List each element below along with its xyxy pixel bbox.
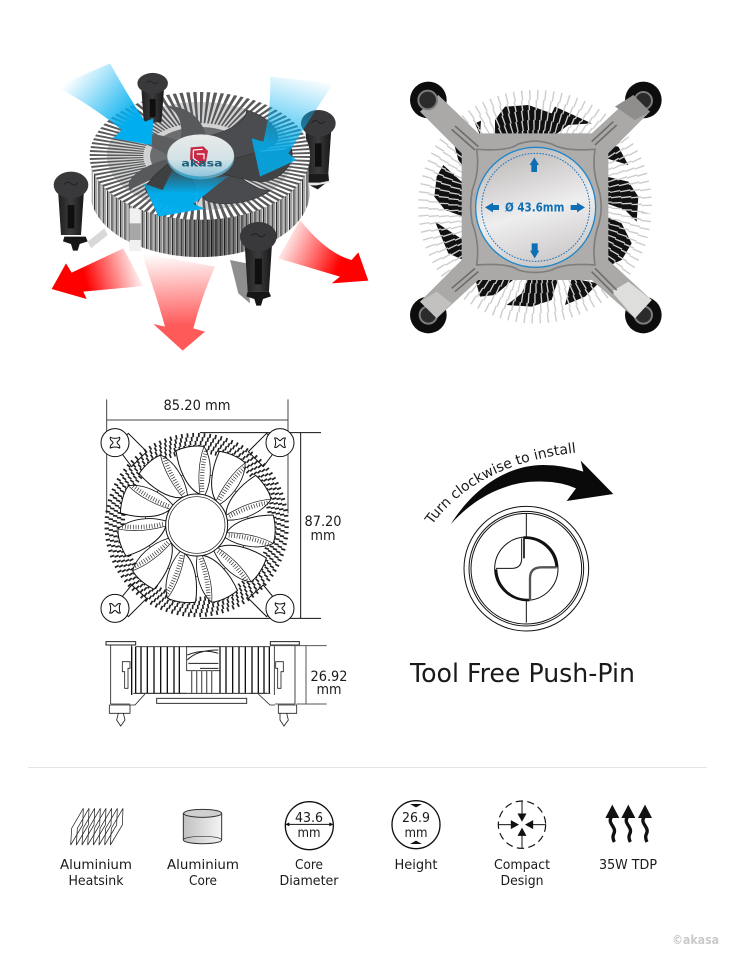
panel: tool free push pin: Turn clockwise to install: [424, 442, 575, 522]
icon: logo mark: [190, 146, 208, 166]
height label: mm: [316, 682, 342, 698]
base plate: [133, 693, 267, 703]
icon: diameter circle: [285, 802, 333, 850]
icon values: 43.6: [295, 811, 323, 826]
hub: [166, 494, 228, 556]
arrow: blue inflow top right: [252, 77, 333, 177]
icon values: mm: [298, 826, 320, 841]
bracket slots: [452, 122, 617, 293]
logo wordmark: akasa: [181, 158, 223, 169]
arrow: blue inflow top left: [57, 63, 153, 145]
depth label: 87.20: [304, 514, 342, 530]
pin: right: [301, 110, 336, 189]
label: Core: [189, 874, 217, 889]
label: Aluminium: [60, 858, 132, 873]
pin slots: [110, 437, 285, 614]
icon: compact arrows: [498, 801, 546, 849]
core ridge: [471, 141, 601, 272]
width label: 85.20 mm: [164, 398, 230, 414]
dotted core outline: [482, 153, 590, 261]
pin: front: [240, 222, 277, 306]
mount arms: [117, 433, 278, 617]
label: [60, 858, 132, 889]
front support under cooler: [230, 260, 250, 303]
mounting feet: [410, 82, 662, 333]
core contact circle: [476, 147, 596, 267]
label: Heatsink: [68, 874, 124, 889]
label: [280, 858, 339, 889]
corner pins: [101, 429, 294, 622]
heatsink fins: [418, 89, 652, 324]
label: Core: [295, 858, 323, 873]
feature: aluminium core: [167, 809, 239, 889]
icon values: [295, 811, 323, 841]
fan window: [187, 647, 220, 671]
label: Aluminium: [167, 858, 239, 873]
fan blades: [118, 157, 185, 196]
arrow: clockwise swoosh: [451, 461, 613, 524]
arrow: red exhaust bottom: [142, 253, 215, 351]
pin caps: [106, 642, 299, 645]
label: Height: [394, 858, 438, 873]
label: Compact: [494, 858, 550, 873]
height label: [310, 669, 348, 698]
label: [494, 858, 550, 889]
bracket: [420, 95, 652, 318]
icon: cylinder: [183, 809, 222, 844]
foot caps: [418, 91, 652, 324]
side fins: [92, 156, 310, 257]
icon values: 26.9: [402, 811, 430, 826]
push pin outline: [464, 506, 589, 631]
dimension lines: [107, 399, 321, 618]
arrow: blue inflow centre: [143, 169, 228, 217]
feature: core diameter: [280, 802, 339, 889]
panel: side view dimension drawing: [106, 642, 327, 726]
label: Diameter: [280, 874, 339, 889]
label: [167, 858, 239, 889]
diameter arrows: [485, 157, 585, 258]
panel: base plate with core diameter: [410, 82, 662, 333]
panel: cooler airflow illustration: [52, 63, 368, 351]
label: 35W TDP: [599, 858, 657, 873]
cooler: heatsink and fan: [90, 92, 310, 303]
fan hub with logo: [167, 134, 234, 179]
arrow: red exhaust left: [52, 248, 143, 299]
heatsink fins: [136, 647, 270, 693]
push pin drawing and arrow: [451, 461, 613, 631]
install direction text: [432, 452, 582, 525]
pin: rear left: [137, 73, 168, 122]
icon values: mm: [404, 826, 428, 841]
panel: tool free push pin: [409, 442, 635, 689]
radial fins: [100, 428, 293, 622]
core diameter label: Ø 43.6mm: [505, 201, 564, 215]
heading: Tool Free Push-Pin: [409, 659, 635, 689]
bracket highlights: [612, 282, 652, 318]
fan blades seen through fins: [434, 105, 638, 307]
footer brand: ©akasa: [672, 933, 719, 947]
icon: height circle: [392, 801, 440, 849]
pin: left: [54, 172, 108, 251]
feature: height: [392, 801, 440, 873]
icon: heat arrows: [605, 805, 652, 842]
depth label: mm: [310, 528, 336, 544]
height dimension: [270, 646, 327, 704]
push pin feet: [109, 705, 297, 726]
fan: [116, 446, 278, 607]
feature: compact design: [494, 801, 550, 889]
arrow: red exhaust right: [278, 220, 368, 283]
panel: top view dimension drawing: [100, 399, 321, 622]
feature: aluminium heatsink: [60, 808, 132, 889]
feature: 35W TDP: [599, 805, 657, 873]
label: Design: [500, 874, 544, 889]
icon values: [402, 811, 430, 841]
divider: [28, 767, 707, 768]
height label: 26.92: [310, 669, 348, 685]
depth label: [304, 514, 342, 544]
pin bodies: [111, 645, 295, 704]
icon: heatsink fins: [71, 808, 123, 845]
